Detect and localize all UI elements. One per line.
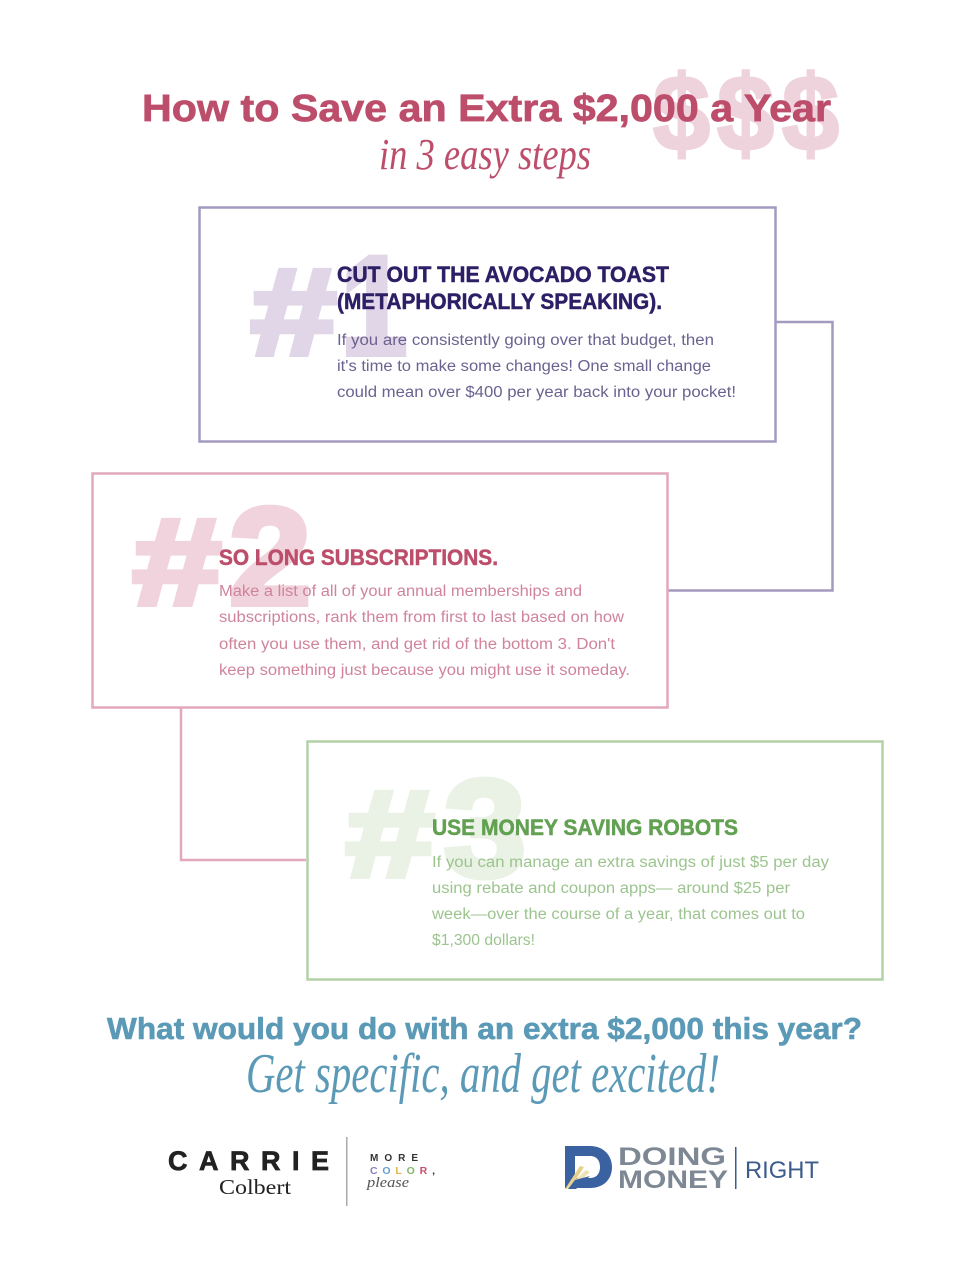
closing script line: Get specific, and get excited! xyxy=(246,1043,720,1105)
step 3 body text xyxy=(431,854,829,949)
step 1 body text xyxy=(337,332,736,401)
panel: step 3 xyxy=(308,742,882,980)
step 3 body text: $1,300 dollars! xyxy=(432,932,535,949)
background dollar signs: $ xyxy=(653,53,710,173)
closing question: What would you do with an extra $2,000 this year? xyxy=(107,1011,862,1046)
logo: Carrie Colbert xyxy=(168,1137,435,1206)
connector: step 1 to step 2 xyxy=(668,322,832,590)
step 1 body text: could mean over $400 per year back into your pocket! xyxy=(337,384,736,401)
step 1 heading xyxy=(337,262,670,314)
step 3 body text: using rebate and coupon apps— around $25 per xyxy=(432,880,790,897)
step 2 large numeral: # xyxy=(133,494,221,630)
step 1 large numeral: # xyxy=(251,244,336,380)
step 1 large numeral: 1 xyxy=(341,227,407,384)
logo: Carrie Colbert: please xyxy=(366,1175,409,1191)
step 2 body text xyxy=(219,583,630,679)
step 2 body text: subscriptions, rank them from first to last based on how xyxy=(219,609,625,626)
step 2 body text: Make a list of all of your annual memberships and xyxy=(219,583,582,600)
icon: D mark xyxy=(565,1146,612,1189)
background dollar signs xyxy=(653,53,839,173)
panel: step 1 xyxy=(200,208,776,442)
logo: Carrie Colbert: MORE xyxy=(370,1153,418,1164)
step 1 large numeral xyxy=(251,227,407,384)
step 1 heading: (METAPHORICALLY SPEAKING). xyxy=(337,289,662,314)
title: How to Save an Extra $2,000 a Year xyxy=(142,88,831,130)
logo: Doing Money Right xyxy=(565,1143,819,1194)
logo: Doing Money Right: DOING xyxy=(618,1143,726,1171)
panel: step 2 xyxy=(92,474,668,708)
logo: Carrie Colbert: CARRIE xyxy=(168,1146,329,1176)
step 3 heading: USE MONEY SAVING ROBOTS xyxy=(432,815,738,840)
connector: step 2 to step 3 xyxy=(181,708,306,860)
step 2 heading: SO LONG SUBSCRIPTIONS. xyxy=(219,545,498,570)
logo: Doing Money Right: RIGHT xyxy=(745,1157,819,1184)
step 3 large numeral: 3 xyxy=(444,752,526,906)
step 2 body text: often you use them, and get rid of the bottom 3. Don't xyxy=(219,636,616,653)
step 1 heading: CUT OUT THE AVOCADO TOAST xyxy=(337,262,670,287)
step 3 body text: If you can manage an extra savings of just $5 per day xyxy=(432,854,829,871)
background dollar signs: $ xyxy=(717,53,774,173)
step 1 body text: it's time to make some changes! One small change xyxy=(337,358,711,375)
logo: Carrie Colbert: Colbert xyxy=(219,1175,291,1199)
subtitle script: in 3 easy steps xyxy=(379,130,591,179)
logo: Doing Money Right: MONEY xyxy=(618,1166,728,1194)
step 2 large numeral: 2 xyxy=(229,480,311,634)
step 3 large numeral xyxy=(346,752,526,906)
step 3 large numeral: # xyxy=(346,766,434,902)
step 2 large numeral xyxy=(133,480,311,634)
step 2 body text: keep something just because you might use it someday. xyxy=(219,662,630,679)
background dollar signs: $ xyxy=(782,53,839,173)
logo: Carrie Colbert: C O L O R , xyxy=(370,1165,435,1177)
step 1 body text: If you are consistently going over that budget, then xyxy=(337,332,714,349)
step 3 body text: week—over the course of a year, that comes out to xyxy=(431,906,805,923)
